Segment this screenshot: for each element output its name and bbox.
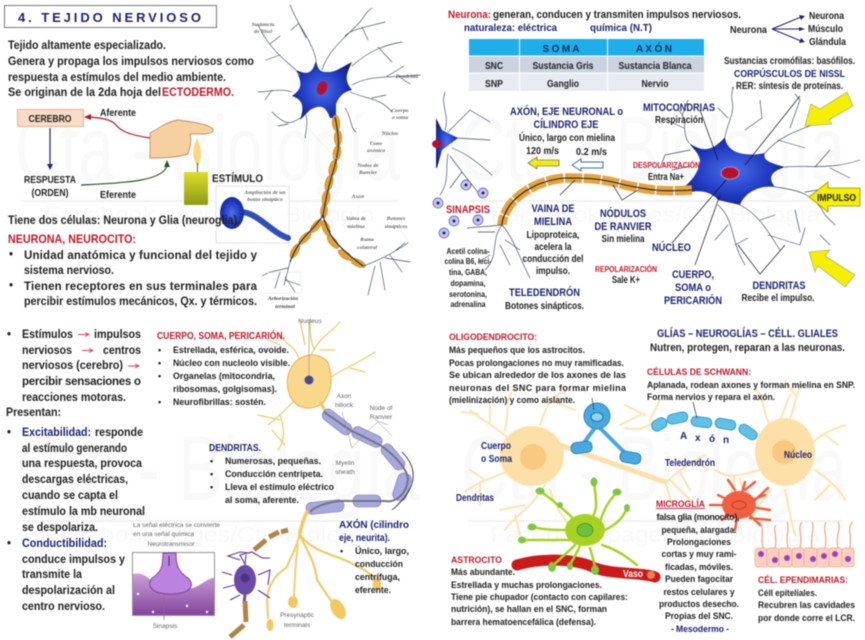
table soma axon: S O M A <box>542 44 580 55</box>
title <box>4 6 216 28</box>
neuron labels: Botones <box>386 216 405 222</box>
impulso arrow <box>809 182 860 212</box>
vaina de mielina text <box>522 203 584 277</box>
title: 4. TEJIDO NERVIOSO <box>18 10 201 25</box>
vaina de mielina text: MIELINA <box>534 216 572 228</box>
cuerpo soma text: Organelas (mitocondria, <box>173 371 275 381</box>
neuron labels: Cono <box>370 141 382 147</box>
axon text: Único, largo con mielina <box>519 131 615 144</box>
oligodendrocito text: Más pequeños que los astrocitos. <box>449 345 585 355</box>
bottom left text: nerviosos <box>22 345 72 357</box>
repolarizacion text: Sale K+ <box>612 275 640 286</box>
bottom left text: responde <box>95 427 143 439</box>
bottom left text: al estímulo generando <box>22 443 127 455</box>
astrocito text: Estrellada y muchas prolongaciones. <box>451 580 602 590</box>
bottom left text: transmite la <box>22 569 83 581</box>
arrow: fast conduction <box>528 157 559 169</box>
bottom left text: • <box>7 538 11 550</box>
mitocondrias text: MITOCONDRIAS <box>643 102 715 114</box>
inset: botón sináptico: Ampliación de un <box>243 190 286 196</box>
glia labels: o Soma <box>481 454 512 465</box>
microglia text: restos celulares y <box>664 587 734 597</box>
neuron section text: Tiene dos células: Neurona y Glia (neuroglia). <box>8 215 240 227</box>
neuron labels: de Nissl <box>254 29 273 35</box>
intro text: Genera y propaga los impulsos nerviosos como <box>8 56 254 68</box>
despolarizacion text: DESPOLARIZACIÓN <box>633 161 700 170</box>
myelin sheath <box>288 115 367 270</box>
synapse image: en una señal química <box>133 531 194 538</box>
bottom left text: Conductibilidad: <box>22 538 107 550</box>
vaina de mielina text: conducción del <box>522 254 584 265</box>
reflex diagram: RESPUESTA <box>24 175 76 186</box>
reflex diagram <box>18 108 263 205</box>
dendritas label: DENDRITAS <box>752 280 806 292</box>
teledendron label <box>505 286 584 312</box>
dendritas text: • <box>210 469 213 479</box>
impulso arrow: IMPULSO <box>817 193 856 204</box>
ependimarias text: Céll epiteliales. <box>758 588 817 598</box>
axon text bottom: eferente. <box>355 585 391 595</box>
icon: ependymal cells <box>755 522 854 567</box>
teledendron <box>467 225 530 278</box>
top right heading <box>448 9 741 34</box>
sinapsis text <box>444 204 492 309</box>
labels: Nucleus <box>298 318 322 325</box>
reflex diagram: ESTÍMULO <box>212 172 263 185</box>
ependimarias text: por donde corre el LCR. <box>758 613 855 623</box>
bottom left text: impulsos <box>94 329 141 341</box>
oligodendrocito text: Se ubican alrededor de los axones de las <box>449 370 626 380</box>
despolarizacion text: Entra Na+ <box>648 172 684 183</box>
axon text: CÍLINDRO EJE <box>534 118 598 131</box>
axon text bottom <box>339 518 409 595</box>
schwann text: Forma nervios y repara el axón. <box>647 392 775 402</box>
glias heading: Nutren, protegen, reparan a las neuronas. <box>650 342 845 354</box>
labels: terminals <box>284 622 311 629</box>
microglia text: pequeña, alargada. <box>662 525 736 535</box>
neuron illustration: main top right <box>467 87 860 278</box>
axon text bottom: AXÓN (cilindro <box>339 518 409 531</box>
synaptic vesicles <box>433 180 488 238</box>
astrocito text: barrera hematoencefálica (defensa). <box>451 617 596 627</box>
oligodendrocito text: Pocas prolongaciones no muy ramificadas. <box>449 358 624 368</box>
nodulos de ranvier text: Sin mielina <box>602 234 645 245</box>
myelin segments <box>305 407 413 515</box>
neuron labels: Nodos de <box>356 163 379 169</box>
dendritas text: Conducción centrípeta. <box>225 469 323 479</box>
sinapsis text: adrenalina <box>450 300 486 309</box>
neuron labels <box>252 22 418 310</box>
table soma axon: Sustancia Gris <box>532 61 594 72</box>
axon text <box>510 105 623 171</box>
nucleo label: NÚCLEO <box>652 241 691 254</box>
neuron labels: Arborización <box>267 296 298 302</box>
top right heading: generan, conducen y transmiten impulsos nerviosos. <box>493 9 741 21</box>
dendritas label <box>742 280 815 304</box>
oligodendrocito text: neuronas del SNC para formar mielina <box>449 383 627 393</box>
despolarizacion text <box>633 161 700 183</box>
nissl text: RER: síntesis de proteínas. <box>736 81 843 92</box>
axon text: AXÓN, EJE NEURONAL o <box>510 105 623 118</box>
bottom left text: se despolariza. <box>22 522 98 534</box>
labels: Myelin <box>336 460 355 467</box>
neuron section text: • <box>9 280 13 292</box>
intro text: ECTODERMO. <box>162 87 234 99</box>
watermark <box>15 98 848 547</box>
ependimarias text: CÉL. EPENDIMARIAS: <box>758 575 848 585</box>
vaina de mielina text: Lipoproteica, <box>526 230 580 241</box>
reflex diagram: Aferente <box>100 108 136 119</box>
glia labels: Núcleo <box>784 450 812 461</box>
synapse image: Sinapsis <box>153 623 178 630</box>
sinapsis text: colina B6, leci- <box>444 257 492 266</box>
neuron section text: Unidad anatómica y funcional del tejido y <box>24 250 258 262</box>
neuron section text <box>8 215 258 308</box>
yellow arrow bottom <box>809 250 855 287</box>
labels: Axon <box>337 393 352 400</box>
microglia text: - <box>671 624 674 634</box>
bottom left text: nerviosos (cerebro) <box>22 360 123 372</box>
reflex diagram: CEREBRO <box>28 114 72 125</box>
neuron section text: sistema nervioso. <box>24 265 114 277</box>
sinapsis text: Acetil colina- <box>446 247 490 256</box>
arrow: slow conduction <box>572 159 603 171</box>
neuron illustration: labelled neuron top left <box>252 5 420 310</box>
dendritas text: Numerosas, pequeñas. <box>225 456 321 466</box>
intro text: Tejido altamente especializado. <box>8 40 166 52</box>
intro text: Se originan de la 2da hoja del <box>8 87 161 99</box>
top right heading: naturaleza: eléctrica <box>464 22 557 34</box>
cuerpo label: CUERPO, <box>672 269 714 281</box>
astrocito text: Más abundante. <box>451 567 515 577</box>
bottom left text: cuando se capta el <box>22 490 118 502</box>
table soma axon <box>469 39 704 91</box>
synapse image: La señal eléctrica se convierte <box>133 522 220 529</box>
table soma axon: SNC <box>485 61 503 72</box>
table soma axon: Sustancia Blanca <box>618 61 692 72</box>
table soma axon: A X Ó N <box>636 42 672 55</box>
neuron labels: terminal <box>275 304 295 310</box>
icon: astrocyte <box>517 478 655 580</box>
watermark: Cta - Biología <box>15 418 421 520</box>
teledendron label: TELEDENDRÓN <box>509 286 580 299</box>
nodulos de ranvier text: DE RANVIER <box>594 221 652 233</box>
nissl text: CORPÚSCULOS DE NISSL <box>734 67 845 80</box>
microglia text: Mesodermo <box>676 624 724 634</box>
microglia text <box>656 499 740 634</box>
labels: Node of <box>370 405 393 412</box>
table soma axon: Nervio <box>642 79 668 90</box>
microglia text: MICROGLÍA <box>656 499 705 509</box>
presynaptic neuron top right <box>432 92 492 238</box>
neuron section text: percibir estímulos mecánicos, Qx. y térmicos. <box>24 296 257 308</box>
bottom left text: despolarización al <box>22 585 115 597</box>
teledendron label: Botones sinápticos. <box>505 301 584 312</box>
neuron labels: o soma <box>392 115 408 121</box>
dendritas text <box>209 443 334 505</box>
watermark: Facebook pages/Cta-Biología <box>45 202 376 227</box>
bottom left text: Excitabilidad: <box>22 427 91 439</box>
glia labels <box>456 431 812 504</box>
bottom left text: • <box>7 427 11 439</box>
intro text: respuesta a estímulos del medio ambiente. <box>8 72 226 84</box>
labels: Ranvier <box>370 414 393 421</box>
cuerpo soma text: Estrellada, esférica, ovoide. <box>173 345 289 355</box>
ependimarias text: Recubren las cavidades <box>758 600 855 610</box>
astrocito text: Tiene pie chupador (contacto con capilares: <box>451 592 628 602</box>
glias heading <box>650 327 845 354</box>
sinapsis text: SINAPSIS <box>446 204 490 216</box>
synapse image <box>132 522 220 630</box>
cuerpo soma text: • <box>158 397 161 407</box>
neuron section text: • <box>9 249 13 261</box>
cuerpo soma text: • <box>158 371 161 381</box>
oligodendrocito text <box>449 332 627 405</box>
dendritas label: Recibe el impulso. <box>742 293 815 304</box>
vaina de mielina text: acelera la <box>534 242 572 253</box>
microglia text: ficadas, móviles. <box>665 562 733 572</box>
nodulos de ranvier text <box>594 207 652 245</box>
axon text bottom: conducción <box>355 559 403 569</box>
neuron labels: mielina <box>347 224 365 230</box>
bottom left text: Presentan: <box>6 407 61 419</box>
neuron section text: NEURONA, NEUROCITO: <box>8 234 136 246</box>
neuron targets diagram: Neurona <box>809 11 844 22</box>
bottom left text: centro nervioso. <box>22 601 105 613</box>
watermark: Facebook pages/Cta-Biología <box>490 522 821 547</box>
axon text bottom: Único, largo, <box>355 545 409 556</box>
bottom left text: • <box>7 329 11 341</box>
bottom left text: centros <box>103 345 141 357</box>
neuron targets diagram: Músculo <box>808 24 843 35</box>
watermark: Facebook pages/Cta-Biología <box>490 202 821 227</box>
yellow neuron bottom left <box>258 318 413 631</box>
schwann text: Aplanada, rodean axones y forman mielina en SNP. <box>647 380 855 390</box>
icon: astrocyte: Vaso <box>623 569 643 580</box>
bottom left text: una respuesta, provoca <box>22 458 143 470</box>
mitocondrias text: Respiración <box>655 115 703 126</box>
axon text bottom: • <box>340 546 343 556</box>
neuron labels: Sustancia <box>252 22 275 28</box>
neuron labels: Vaina de <box>346 216 367 222</box>
intro text <box>8 40 254 99</box>
icon: hand <box>150 120 213 158</box>
axon terminals <box>267 512 376 618</box>
axon text: 0.2 m/s <box>576 147 607 158</box>
cuerpo soma text: Neurofibrillas: sostén. <box>173 397 266 407</box>
bottom left text: reacciones motoras. <box>22 392 126 404</box>
labels: hillock <box>335 402 354 409</box>
cuerpo soma text: ribosomas, golgisomas). <box>173 384 277 394</box>
mitocondrias text <box>643 102 715 126</box>
vaina de mielina text: impulso. <box>536 266 570 277</box>
sinapsis text: serotonina, <box>449 290 487 299</box>
neuron labels: axónico <box>367 148 385 154</box>
axon text: 120 m/s <box>526 146 559 157</box>
glia labels: n <box>723 435 729 446</box>
dendritas text: al soma, aferente. <box>225 495 299 505</box>
microglia text: Propias del SNC. <box>665 611 733 621</box>
inset: botón sináptico <box>216 186 289 243</box>
table soma axon: SNP <box>485 79 503 90</box>
nodulos de ranvier text: NÓDULOS <box>600 207 646 220</box>
neuron labels: colateral <box>357 245 378 251</box>
glia labels: A <box>680 431 687 442</box>
dendritas text: • <box>210 482 213 492</box>
microglia text: Prolongaciones <box>667 537 731 547</box>
watermark: Facebook pages/Cta-Biología <box>45 522 376 547</box>
glia labels: Teledendrón <box>665 458 715 469</box>
microglia text: productos desecho. <box>659 599 739 609</box>
cuerpo soma text: • <box>158 358 161 368</box>
dendritas text: • <box>210 456 213 466</box>
cuerpo soma text: • <box>158 345 161 355</box>
labels: Presynaptic <box>280 612 315 619</box>
icon: candle <box>184 138 208 205</box>
sinapsis text: tina, GABA, <box>449 268 487 277</box>
sinapsis text: dopamina, <box>450 279 486 288</box>
bottom left text: percibir sensaciones o <box>22 376 141 388</box>
reflex diagram: (ORDEN) <box>32 188 68 199</box>
table soma axon: Ganglio <box>547 79 579 90</box>
cuerpo label: PERICARIÓN <box>664 294 722 307</box>
microglia text: - <box>726 624 729 634</box>
inset: botón sináptico: botón sináptico <box>247 197 283 203</box>
bottom left text <box>6 329 145 613</box>
neuron labels: sinápticos <box>383 224 408 230</box>
glia labels: Cuerpo <box>481 441 511 452</box>
yellow arrow top <box>805 92 853 126</box>
bottom left text: estímulo la mb neuronal <box>22 506 145 518</box>
cuerpo label <box>664 269 722 307</box>
cuerpo soma text: CUERPO, SOMA, PERICARIÓN. <box>157 329 285 342</box>
astrocito text <box>451 555 628 627</box>
neuron labels: Ranvier <box>358 170 378 176</box>
schwann cells <box>650 402 759 442</box>
astrocito text: ASTROCITO <box>451 555 502 565</box>
microglia text: Pueden fagocitar <box>665 574 733 584</box>
synapse image: Neurotransmisor <box>148 541 195 548</box>
icon: oligodendrocyte <box>570 398 642 465</box>
ependimarias text <box>758 575 855 623</box>
oligodendrocito text: OLIGODENDROCITO: <box>449 332 537 342</box>
neuron labels: Rama <box>359 237 374 243</box>
cuerpo label: SOMA o <box>675 282 711 294</box>
vaina de mielina text: VAINA DE <box>532 203 574 215</box>
neuron labels: Núcleo <box>381 131 398 137</box>
top right heading: química (N.T) <box>590 22 652 34</box>
labels <box>280 318 393 629</box>
schwann text <box>647 367 855 402</box>
neuron labels: Dendritos <box>395 74 418 80</box>
axon text bottom: centrífuga, <box>355 572 400 582</box>
icon: microglia <box>710 480 770 530</box>
neuron targets diagram: Neurona <box>730 25 767 36</box>
glia labels: x <box>695 433 701 444</box>
cuerpo soma text: Núcleo con nucleolo visible. <box>173 358 290 368</box>
reflex diagram: Eferente <box>100 190 136 201</box>
bottom left text: conduce impulsos y <box>22 554 126 566</box>
glia labels: ó <box>709 434 715 445</box>
repolarizacion text <box>595 265 657 286</box>
astrocito text: nutrición), se hallan en el SNC, forman <box>451 604 607 614</box>
schwann text: CÉLULAS DE SCHWANN: <box>647 367 751 377</box>
neuron targets diagram <box>730 11 846 48</box>
bottom left text: Estímulos <box>22 329 73 341</box>
neuron targets diagram: Glándula <box>809 37 846 48</box>
dendritas text: Lleva el estímulo eléctrico <box>225 482 334 492</box>
watermark: Cta - Biología <box>15 98 401 200</box>
bottom left text: descargas eléctricas, <box>22 474 128 486</box>
annotation lines <box>560 96 800 274</box>
glias heading: GLÍAS – NEUROGLÍAS – CÉLL. GLIALES <box>657 327 838 340</box>
dendritas text: DENDRITAS. <box>209 443 261 454</box>
repolarizacion text: REPOLARIZACIÓN <box>595 265 657 274</box>
glia diagram: neurons <box>462 380 845 535</box>
axon text bottom: eje, neurita). <box>339 533 390 544</box>
glia labels: Dendritas <box>456 493 494 504</box>
cuerpo soma text <box>157 329 290 407</box>
purple neuron <box>222 530 288 637</box>
microglia text: falsa glia (monocito), <box>656 512 740 522</box>
microglia text: cortas y muy rami- <box>662 549 736 559</box>
neuron section text: Tienen receptores en sus terminales para <box>24 281 258 293</box>
oligodendrocito text: (mielinización) y como aislante. <box>449 395 575 405</box>
neuron labels: Cuerpo <box>391 108 409 114</box>
nissl text <box>724 56 855 92</box>
neuron labels: Axón <box>351 194 364 200</box>
labels: sheath <box>335 469 355 476</box>
top right heading: Neurona: <box>448 9 491 21</box>
